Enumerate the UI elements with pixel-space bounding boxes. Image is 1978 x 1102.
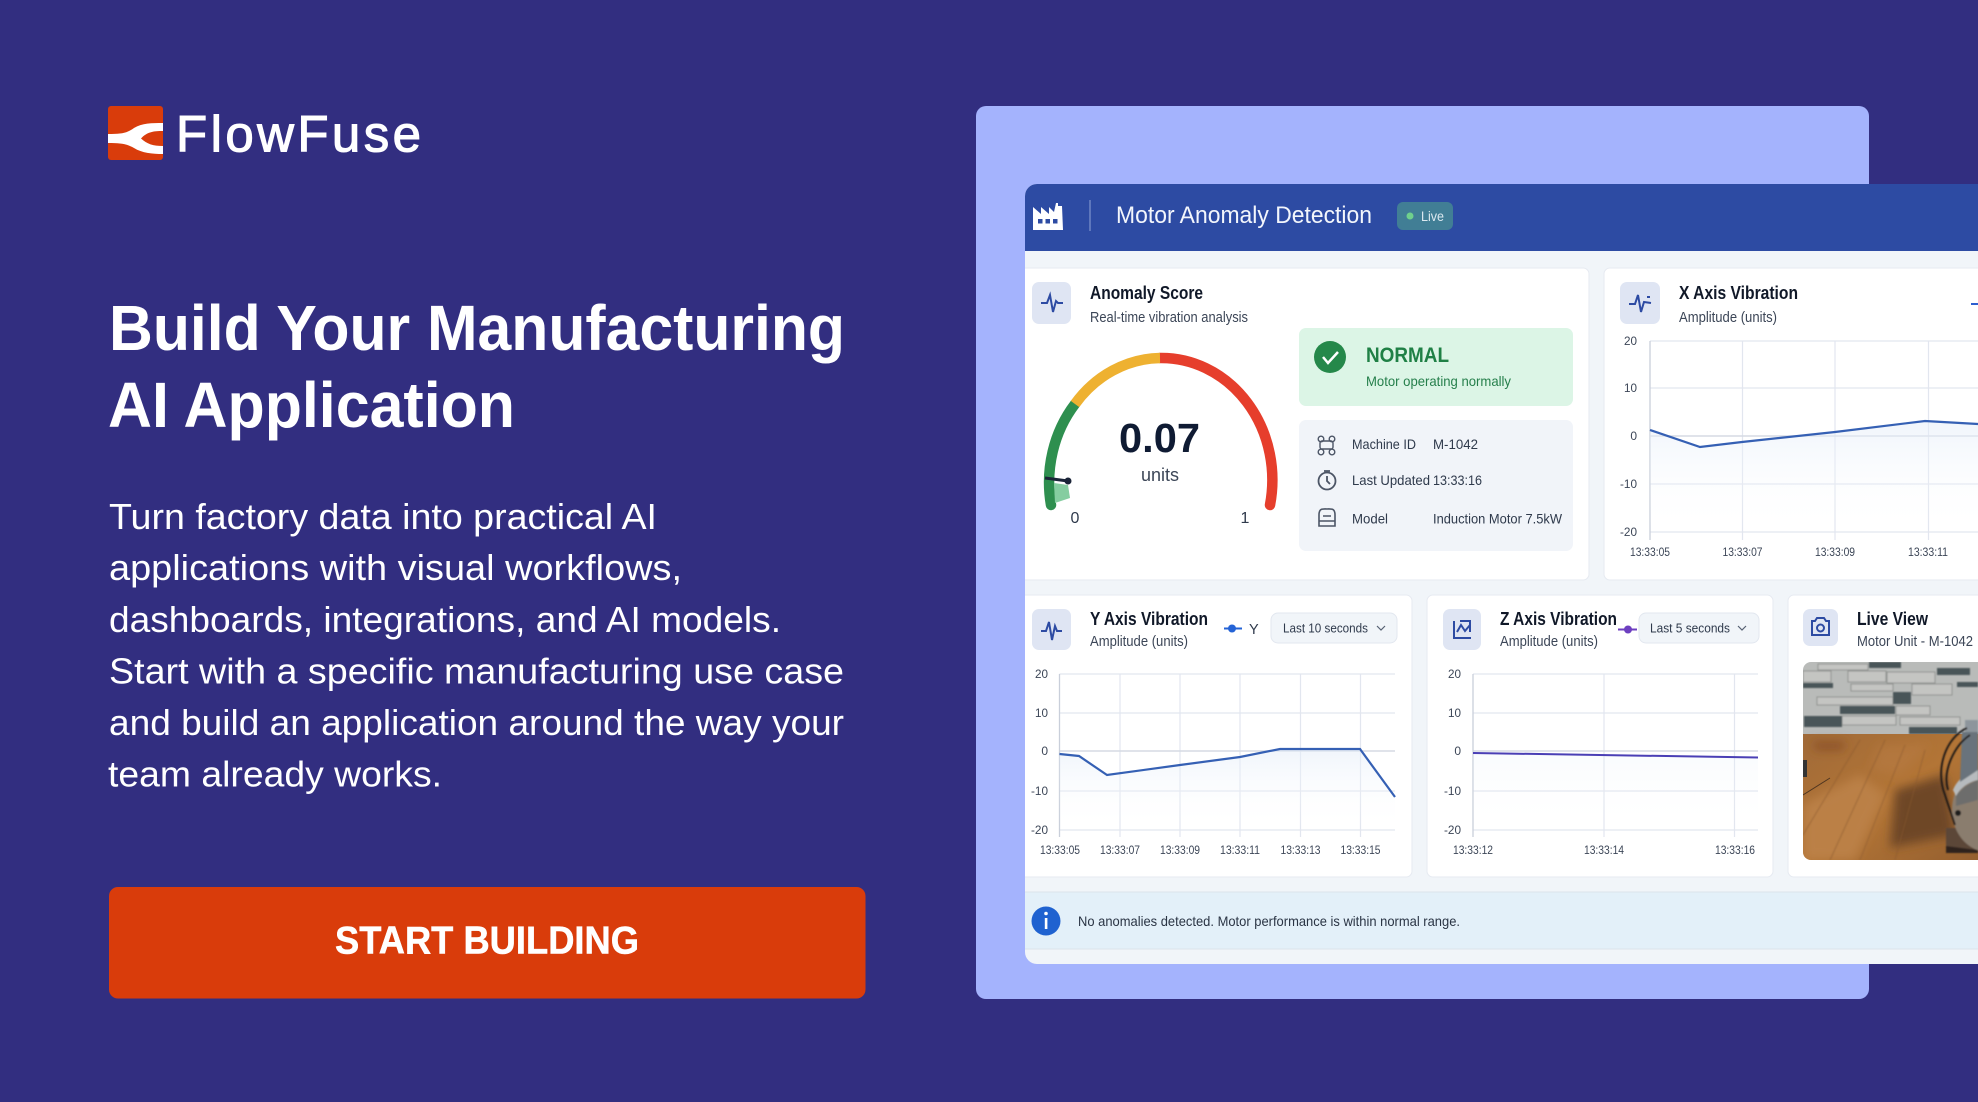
panel: z axis vibration: [1427, 595, 1773, 877]
infographic canvas: [108, 106, 1978, 999]
body paragraph: team already works.: [108, 754, 442, 794]
legend: z: [1618, 626, 1637, 634]
body paragraph: and build an application around the way your: [109, 702, 844, 743]
chart: z axis: [1444, 667, 1758, 857]
chart: y axis: 13:33:11: [1220, 843, 1260, 857]
icon: clock: [1318, 471, 1336, 490]
legend: y: [1224, 624, 1258, 634]
panel: live view: [1788, 595, 1978, 877]
chart: y axis: 13:33:07: [1100, 843, 1140, 857]
status: normal: Motor operating normally: [1366, 373, 1511, 389]
status: normal: NORMAL: [1366, 344, 1449, 367]
panel: y axis vibration: Y Axis Vibration: [1090, 609, 1208, 629]
chart: y axis: 13:33:15: [1340, 843, 1381, 857]
chart: y axis: -20: [1031, 823, 1048, 837]
panel: live view: Live View: [1857, 609, 1929, 629]
icon: info: [1032, 906, 1060, 936]
chart: x axis: -10: [1620, 477, 1637, 491]
headline: Build Your Manufacturing: [109, 292, 845, 364]
dropdown: last 5 seconds: [1639, 613, 1759, 643]
panel: periwinkle backdrop: [976, 106, 1869, 999]
headline: AI Application: [108, 369, 515, 441]
chart: z axis: 20: [1448, 667, 1461, 681]
chart: x axis: 13:33:09: [1815, 545, 1855, 559]
dashboard header: [1025, 184, 1978, 251]
chart: z axis: -10: [1444, 784, 1461, 798]
gauge value: 0.07: [1119, 415, 1200, 461]
chart: y axis: 10: [1035, 706, 1048, 720]
info bar: [1020, 892, 1978, 949]
machine details: 13:33:16: [1433, 472, 1482, 488]
panel: x axis vibration: Amplitude (units): [1679, 310, 1777, 326]
chart: y axis: 13:33:09: [1160, 843, 1200, 857]
gauge: units: [1141, 465, 1179, 485]
chart: x axis: 10: [1624, 381, 1637, 395]
panel: dashboard screenshot: [1020, 184, 1978, 964]
chart: x axis: 13:33:11: [1908, 545, 1948, 559]
chart: y axis: [1031, 667, 1395, 857]
chart: x axis: 13:33:07: [1722, 545, 1763, 559]
gauge: [1045, 358, 1272, 527]
icon: machine: [1318, 436, 1335, 455]
icon: pulse: [1620, 282, 1660, 324]
chart: x axis: -20: [1620, 525, 1637, 539]
chart: y axis: -10: [1031, 784, 1048, 798]
machine details: Induction Motor 7.5kW: [1433, 510, 1563, 526]
photo: motor on wood floor: [1803, 662, 1978, 860]
status: normal: [1299, 328, 1573, 406]
live badge: [1397, 202, 1453, 230]
gauge: 0: [1071, 510, 1080, 527]
chart: z axis: 13:33:14: [1584, 843, 1624, 857]
machine details: Model: [1352, 510, 1388, 526]
headline: [108, 292, 845, 441]
legend stub: [1971, 303, 1978, 305]
logo mark: [108, 106, 163, 160]
gauge: 1: [1241, 510, 1250, 527]
dashboard body: [1025, 184, 1978, 964]
chart: x axis: 13:33:05: [1630, 545, 1670, 559]
body paragraph: [108, 496, 844, 794]
panel: anomaly score: [1020, 268, 1589, 580]
legend: y: Y: [1249, 622, 1259, 638]
chart: z axis: 0: [1454, 744, 1461, 758]
logo wordmark: FlowFuse: [176, 106, 421, 162]
icon: factory: [1033, 203, 1063, 230]
panel: z axis vibration: Z Axis Vibration: [1500, 609, 1617, 629]
machine details: Last Updated: [1352, 472, 1430, 488]
live badge: Live: [1421, 208, 1444, 224]
body paragraph: Turn factory data into practical AI: [109, 496, 657, 537]
anomaly subheading: Real-time vibration analysis: [1090, 310, 1248, 326]
chart: z axis: 13:33:12: [1453, 843, 1493, 857]
icon: area chart: [1443, 609, 1481, 650]
chart: y axis: 20: [1035, 667, 1048, 681]
panel: x axis vibration: [1604, 268, 1978, 580]
dropdown: last 10 seconds: Last 10 seconds: [1283, 620, 1368, 636]
dropdown: last 10 seconds: [1271, 613, 1397, 643]
machine details: [1299, 420, 1573, 551]
body paragraph: Start with a specific manufacturing use case: [109, 650, 844, 692]
anomaly heading: Anomaly Score: [1090, 283, 1203, 303]
panel: y axis vibration: Amplitude (units): [1090, 634, 1188, 650]
chart: z axis: 13:33:16: [1715, 843, 1755, 857]
chart: y axis: 13:33:13: [1280, 843, 1321, 857]
machine details: M-1042: [1433, 436, 1478, 452]
panel: y axis vibration: [1020, 595, 1412, 877]
button: start building: [109, 887, 866, 998]
panel: x axis vibration: X Axis Vibration: [1679, 283, 1798, 303]
icon: camera: [1803, 609, 1838, 646]
dashboard title: Motor Anomaly Detection: [1116, 202, 1372, 229]
machine details: Machine ID: [1352, 436, 1416, 452]
chart: x axis: 20: [1624, 334, 1637, 348]
chart: y axis: 0: [1041, 744, 1048, 758]
chart: z axis: 10: [1448, 706, 1461, 720]
body paragraph: dashboards, integrations, and AI models.: [109, 599, 781, 640]
dropdown: last 5 seconds: Last 5 seconds: [1650, 620, 1730, 636]
chart: x axis: 0: [1630, 429, 1637, 443]
panel: z axis vibration: Amplitude (units): [1500, 634, 1598, 650]
icon: motor: [1319, 509, 1335, 526]
logo: FlowFuse: [108, 106, 421, 162]
body paragraph: applications with visual workflows,: [109, 547, 682, 588]
info bar: No anomalies detected. Motor performance is within normal range.: [1078, 913, 1460, 929]
motor: [1941, 720, 1978, 853]
button: start building: START BUILDING: [335, 920, 639, 962]
icon: pulse: [1032, 282, 1071, 324]
chart: z axis: -20: [1444, 823, 1461, 837]
chart: x axis: [1620, 334, 1978, 559]
chart: y axis: 13:33:05: [1040, 843, 1080, 857]
icon: pulse: [1032, 609, 1071, 650]
